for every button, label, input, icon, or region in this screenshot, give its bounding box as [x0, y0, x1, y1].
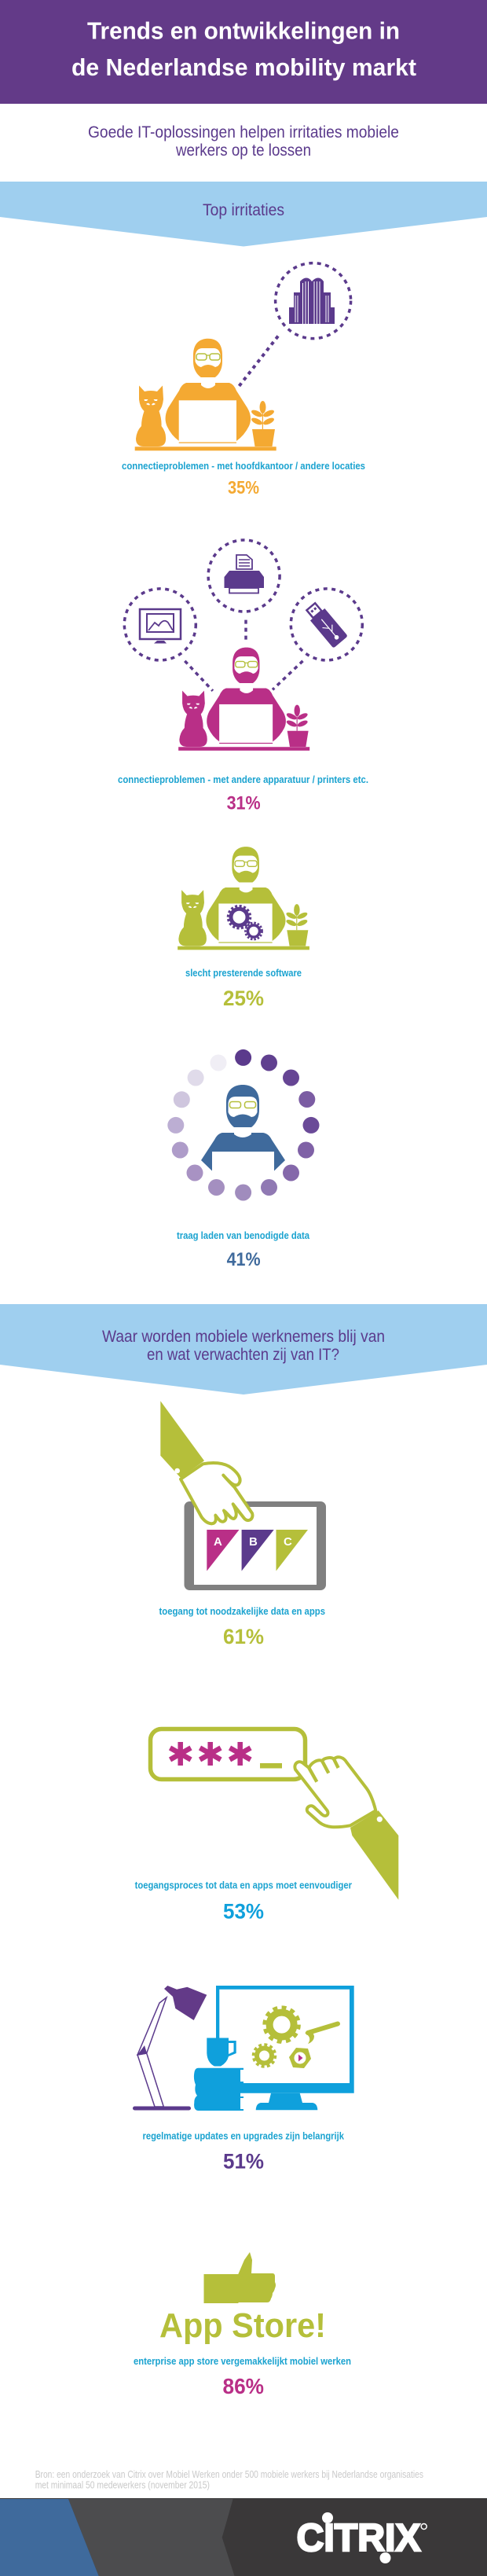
irritation 2: device connection	[118, 540, 368, 814]
irritation 1: headquarters connection	[122, 263, 365, 498]
expectation 2: simpler access	[135, 1729, 398, 1923]
value: 25%	[223, 987, 264, 1010]
expectation 4: app store	[134, 2252, 351, 2398]
chart: loading spinner dots	[167, 1049, 319, 1201]
value: 41%	[227, 1249, 261, 1270]
person: magenta worker with cat and plant	[178, 648, 309, 751]
title: de Nederlandse mobility markt	[71, 53, 416, 81]
label: toegangsproces tot data en apps moet eenvoudiger	[135, 1879, 352, 1891]
icon: gears, wrench and nut	[253, 2008, 338, 2068]
icon: monitor	[216, 1986, 354, 2110]
source note: met minimaal 50 medewerkers (november 2015)	[35, 2479, 210, 2490]
icon: dashed bubble with office building	[276, 263, 351, 339]
icon: thumbs up	[204, 2252, 276, 2303]
label: connectieproblemen - met andere apparatuur / printers etc.	[118, 774, 368, 785]
footer	[0, 2498, 487, 2576]
value: 86%	[223, 2374, 264, 2398]
value: 35%	[228, 477, 259, 498]
dashed connectors	[185, 620, 303, 691]
source note	[35, 2468, 423, 2490]
value: 31%	[227, 793, 261, 814]
person: green worker with cat and plant	[178, 847, 309, 950]
section banner: expectations	[0, 1304, 487, 1395]
person: blue worker	[201, 1085, 285, 1171]
label: toegang tot noodzakelijke data en apps	[159, 1605, 325, 1617]
value: 61%	[223, 1625, 264, 1648]
icon: tablet	[184, 1501, 326, 1590]
section banner: top irritaties	[0, 182, 487, 247]
icon: gears on laptop	[228, 906, 262, 939]
icon: typing hand	[295, 1757, 398, 1900]
section banner: top irritaties: Top irritaties	[203, 201, 284, 219]
value: 53%	[223, 1899, 264, 1923]
title: Trends en ontwikkelingen in	[87, 17, 400, 44]
icon: password field	[151, 1729, 305, 1780]
bubble: monitor	[124, 589, 196, 660]
label: slecht presterende software	[185, 967, 302, 979]
subtitle: Goede IT-oplossingen helpen irritaties mobiele	[88, 123, 399, 141]
logo: Citrix: CITRIX	[297, 2517, 421, 2559]
subtitle: werkers op te lossen	[175, 141, 311, 160]
person: orange worker with cat and plant	[135, 339, 276, 450]
label: connectieproblemen - met hoofdkantoor / andere locaties	[122, 460, 365, 472]
title	[71, 17, 416, 81]
expectation 1: access to data and apps	[159, 1401, 326, 1648]
section banner: expectations: en wat verwachten zij van IT?	[147, 1346, 339, 1364]
icon: cup and books	[194, 2038, 244, 2111]
bubble: usb stick	[291, 589, 362, 660]
subtitle	[88, 123, 399, 160]
icon: triangles A B C: A	[214, 1535, 222, 1549]
section banner: expectations: Waar worden mobiele werknemers blij van	[102, 1328, 385, 1346]
irritation 4: slow data loading	[167, 1049, 319, 1270]
heading: App Store!: App Store!	[159, 2306, 326, 2345]
irritation 3: poor software	[178, 847, 309, 1010]
icon: triangles A B C	[207, 1530, 308, 1571]
bubble: printer	[208, 540, 280, 612]
icon: desk lamp	[133, 1986, 207, 2110]
label: regelmatige updates en upgrades zijn belangrijk	[143, 2130, 345, 2142]
icon: triangles A B C: B	[249, 1535, 258, 1549]
expectation 3: updates and upgrades	[133, 1986, 354, 2174]
label: traag laden van benodigde data	[177, 1229, 310, 1241]
header band	[0, 0, 487, 104]
label: enterprise app store vergemakkelijkt mobiel werken	[134, 2355, 351, 2367]
icon: triangles A B C: C	[284, 1535, 292, 1549]
icon: pointing hand	[160, 1401, 252, 1523]
dotted connector	[239, 334, 280, 386]
value: 51%	[223, 2150, 264, 2174]
